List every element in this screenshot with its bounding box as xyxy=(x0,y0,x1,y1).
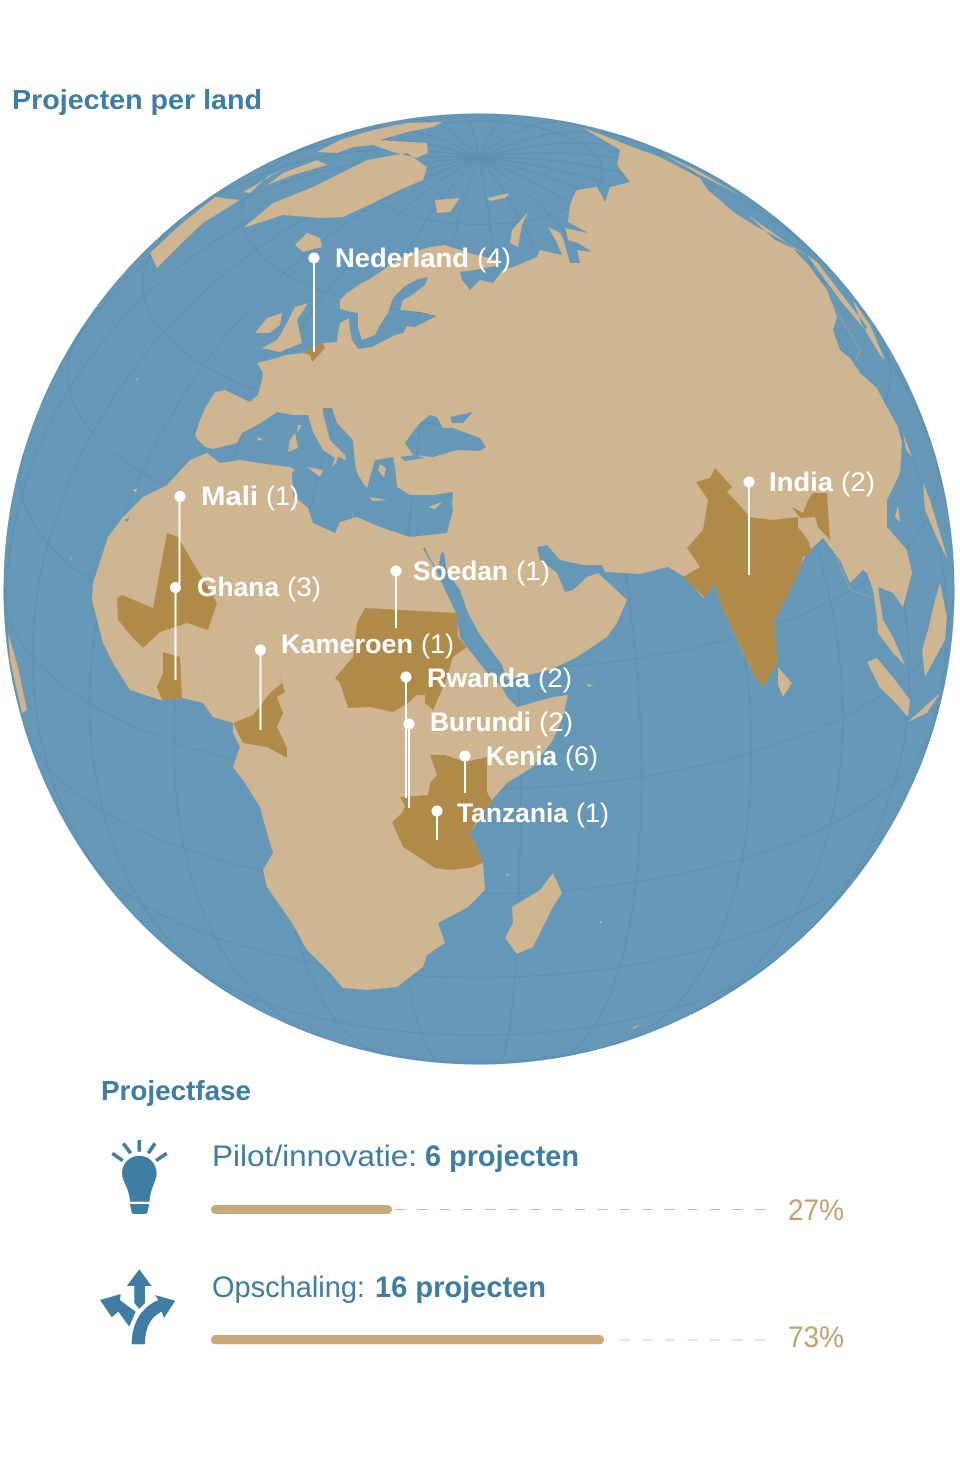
pin: Kenia: (6) xyxy=(565,741,598,771)
pin: Nederland xyxy=(308,243,511,352)
bar: 27 percent xyxy=(211,1205,765,1214)
value: 73 percent: 73% xyxy=(788,1321,844,1354)
highlighted country: Nederland xyxy=(303,343,325,362)
highlighted country: Ghana xyxy=(157,652,182,700)
pin: India: (2) xyxy=(841,467,875,497)
text: opschaling count: Opschaling: xyxy=(212,1271,365,1304)
icon: diverging arrows xyxy=(100,1269,175,1344)
highlighted country: Mali xyxy=(117,533,217,648)
text: opschaling count: 16 projecten xyxy=(375,1271,546,1304)
pin: Mali: Mali xyxy=(201,481,258,511)
pin: Ghana xyxy=(170,572,321,680)
pin: Mali: (1) xyxy=(266,481,299,511)
highlighted country: Kameroen xyxy=(233,668,287,758)
title: projecten per land: Projecten per land xyxy=(12,84,262,115)
pin: Nederland: (4) xyxy=(477,243,511,273)
bar: 73 percent xyxy=(211,1335,765,1344)
text: pilot count xyxy=(212,1140,579,1173)
panel: pilot/innovatie row xyxy=(112,1140,844,1227)
pin: Tanzania xyxy=(432,798,609,840)
country borders xyxy=(108,258,905,955)
pin: Rwanda: Rwanda xyxy=(427,663,531,693)
highlighted country: Soedan xyxy=(335,608,467,712)
pin: Kameroen: Kameroen xyxy=(281,629,413,659)
pin: Kenia: Kenia xyxy=(486,741,558,771)
pin: Kameroen xyxy=(255,629,454,730)
pin: Kameroen: (1) xyxy=(421,629,454,659)
pin: Rwanda xyxy=(400,663,572,798)
pin: Nederland: Nederland xyxy=(335,243,469,273)
ocean disc xyxy=(4,114,954,1064)
text: pilot count: 6 projecten xyxy=(425,1140,579,1173)
icon: light bulb xyxy=(112,1140,167,1214)
pin: India xyxy=(744,467,875,575)
pin: Soedan: Soedan xyxy=(413,556,508,586)
pin: Tanzania: (1) xyxy=(576,798,609,828)
pin: Mali xyxy=(174,481,299,584)
pin: Ghana: Ghana xyxy=(197,572,280,602)
pin: Kenia xyxy=(460,741,598,793)
text: pilot count: Pilot/innovatie: xyxy=(212,1140,417,1173)
map labels xyxy=(170,243,875,840)
pin: Burundi xyxy=(404,707,573,808)
globe map xyxy=(4,114,954,1064)
highlighted country: India xyxy=(683,468,830,687)
pin: Rwanda: (2) xyxy=(538,663,572,693)
panel: opschaling row xyxy=(100,1269,844,1354)
pin: Tanzania: Tanzania xyxy=(457,798,569,828)
pin: Soedan xyxy=(390,556,550,628)
text: opschaling count xyxy=(212,1271,546,1304)
pin: Soedan: (1) xyxy=(516,556,550,586)
land masses xyxy=(8,122,948,1029)
pin: Burundi: (2) xyxy=(539,707,573,737)
highlighted country: Kenia and Tanzania with Rwanda and Burundi xyxy=(392,755,493,870)
pin: Burundi: Burundi xyxy=(430,707,531,737)
graticule xyxy=(4,114,954,1064)
pin: Ghana: (3) xyxy=(287,572,321,602)
value: 27 percent: 27% xyxy=(788,1194,844,1227)
pin: India: India xyxy=(769,467,834,497)
heading: projectfase: Projectfase xyxy=(101,1075,251,1106)
